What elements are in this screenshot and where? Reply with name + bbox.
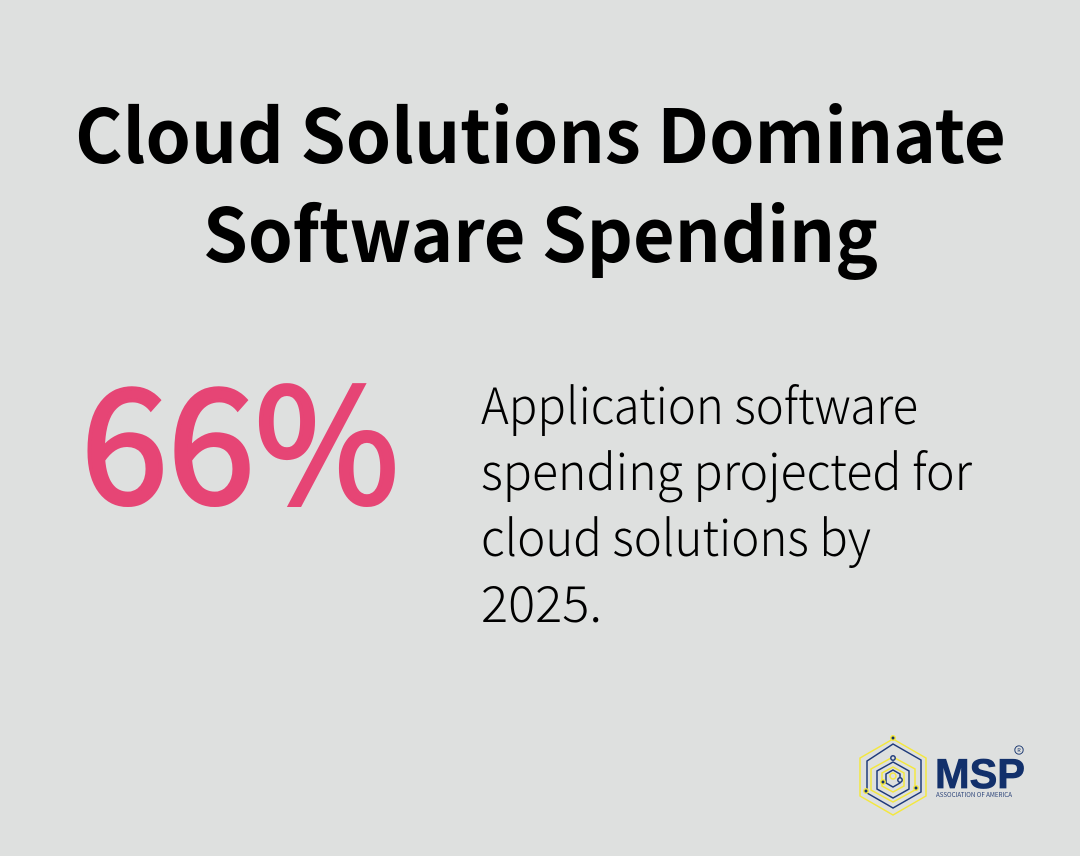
title: Cloud Solutions Dominate <box>75 78 1006 185</box>
logo: MSP Association of America <box>860 736 1025 815</box>
title <box>75 78 1006 284</box>
registered mark <box>1015 746 1023 754</box>
registered mark: R <box>1017 746 1021 754</box>
title: Software Spending <box>203 177 878 284</box>
wordmark: MSP <box>935 750 1025 797</box>
tagline: ASSOCIATION OF AMERICA <box>936 789 1012 799</box>
description text: spending projected for <box>481 433 973 505</box>
icon: hexagon circuit <box>860 736 926 815</box>
big stat: 66%: 66% <box>81 320 399 549</box>
description text: Application software <box>481 367 918 439</box>
description text <box>481 367 973 637</box>
description text: 2025. <box>481 565 602 637</box>
description text: cloud solutions by <box>481 499 871 571</box>
